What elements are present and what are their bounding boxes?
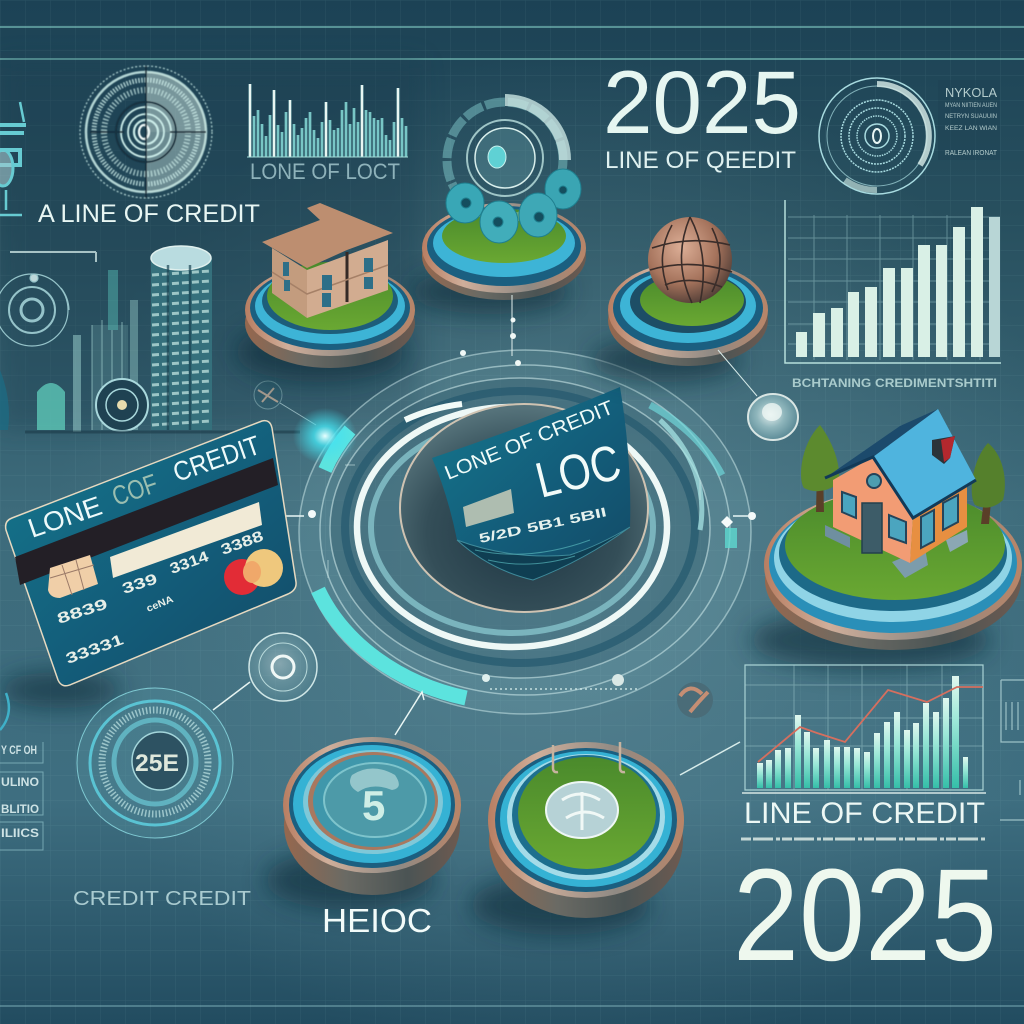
card title: COF — [108, 468, 161, 512]
caption: heloc: HEIOC — [322, 902, 432, 939]
signature strip — [110, 502, 262, 578]
card numbers: 8839 — [55, 596, 110, 628]
icon: cityscape towers — [0, 270, 300, 432]
icon: cyan glow — [293, 408, 357, 464]
text block: top right small text: NYKOLA — [945, 85, 997, 100]
heading: 2025 bottom: 2025 — [733, 841, 997, 988]
caption: lone of loct: LONE OF LOCT — [250, 159, 400, 184]
scribble line — [741, 838, 985, 840]
platform: teal spheres — [422, 100, 586, 300]
magnetic stripe — [15, 458, 278, 585]
text block: top right small text — [938, 80, 1000, 160]
icon: left edge arc — [0, 693, 9, 730]
bar chart: spike histogram — [247, 84, 408, 157]
chip — [48, 555, 98, 598]
icon: small debris glass near left card — [254, 381, 316, 425]
icon: orbit dial left — [0, 252, 96, 346]
card: centre loc card — [432, 387, 630, 580]
connector: globe to glass ball — [718, 350, 757, 396]
platform: big house — [764, 409, 1022, 650]
platform: globe — [608, 217, 768, 366]
button number: 5 — [362, 782, 385, 829]
icon: colourful house — [825, 409, 976, 578]
heading: a line of credit: A LINE OF CREDIT — [38, 200, 260, 228]
card numbers: ceNA — [145, 594, 175, 615]
heading: 2025 top: 2025 — [603, 52, 801, 152]
icon: gauge with number: 25E — [135, 750, 179, 777]
text block: left small labels: BLITIO — [1, 802, 39, 816]
card numbers: 339 — [120, 571, 159, 598]
bar chart: rising bars — [785, 200, 1001, 363]
card title: LONE OF CREDIT — [442, 397, 617, 485]
card title: LONE — [24, 491, 106, 544]
icon: left tree — [801, 425, 839, 512]
icon: hologram ring — [447, 100, 565, 218]
icon: platform shadows — [0, 270, 990, 935]
card chip — [463, 489, 514, 527]
icon: card network logo — [224, 549, 283, 595]
card: credit card — [6, 421, 296, 686]
icon: gauge with number — [77, 688, 233, 838]
panel: left data visuals backdrop — [0, 60, 420, 430]
caption: credit credit: CREDIT CREDIT — [73, 888, 251, 910]
icon: radial chart top right — [819, 78, 935, 194]
connector: centre top — [460, 295, 521, 366]
icon: teal spheres — [446, 169, 581, 243]
icon: right tree — [972, 443, 1005, 524]
text block: top right small text: MYAN NIITIEN AUEN — [945, 103, 997, 109]
card acronym: LOC — [530, 434, 626, 509]
platform: heloc button — [283, 737, 461, 895]
platform: brown building — [245, 203, 415, 368]
icon: copper debris — [677, 682, 713, 718]
icon: machine fragment left edge — [0, 102, 26, 215]
connector: heloc arrow — [395, 692, 424, 735]
icon: hooks — [553, 742, 625, 772]
card numbers: 5/2D 5B1 5BII — [478, 504, 608, 546]
icon: glass ball right — [748, 394, 798, 440]
text block: left small labels: Y CF OH — [1, 743, 37, 757]
caption: bar chart: BCHTANING CREDIMENTSHTITI — [792, 376, 997, 390]
icon: glass ball lower left — [249, 633, 317, 701]
icon: brown building — [262, 203, 393, 318]
text block: top right small text: NETRYN SUAUUIN — [945, 114, 997, 120]
icon: crystal — [546, 782, 618, 838]
panel: central hologram rings — [286, 350, 756, 714]
card title: CREDIT — [169, 430, 264, 488]
icon: right edge fragment — [1000, 680, 1024, 820]
connector: gauge to glass ball — [213, 682, 250, 710]
card title — [24, 430, 264, 544]
card numbers: 3314 — [168, 548, 212, 578]
heading: line of credit bottom: LINE OF CREDIT — [744, 797, 985, 830]
text block: left small labels: ULINO — [1, 775, 39, 789]
text block: left small labels — [0, 742, 43, 850]
chart: bars with red line — [742, 665, 986, 793]
card numbers: 3388 — [219, 528, 266, 559]
connector: green button to chart — [680, 742, 740, 775]
text block: top right small text: KEEZ LAN WIAN — [945, 126, 997, 132]
text block: left small labels: ILIICS — [1, 826, 39, 840]
icon: radial chart top left — [80, 66, 212, 198]
caption: line of qeedit: LINE OF QEEDIT — [605, 147, 796, 174]
text block: top right small text: RALEAN IRONAT — [945, 150, 998, 157]
central dark disc — [400, 404, 648, 612]
card numbers: 33331 — [64, 631, 126, 668]
platform: green button — [488, 742, 684, 918]
icon: copper globe — [648, 217, 732, 303]
icon: glass highlight — [350, 768, 399, 792]
icon: striped tower — [151, 246, 212, 430]
card numbers — [55, 528, 266, 668]
